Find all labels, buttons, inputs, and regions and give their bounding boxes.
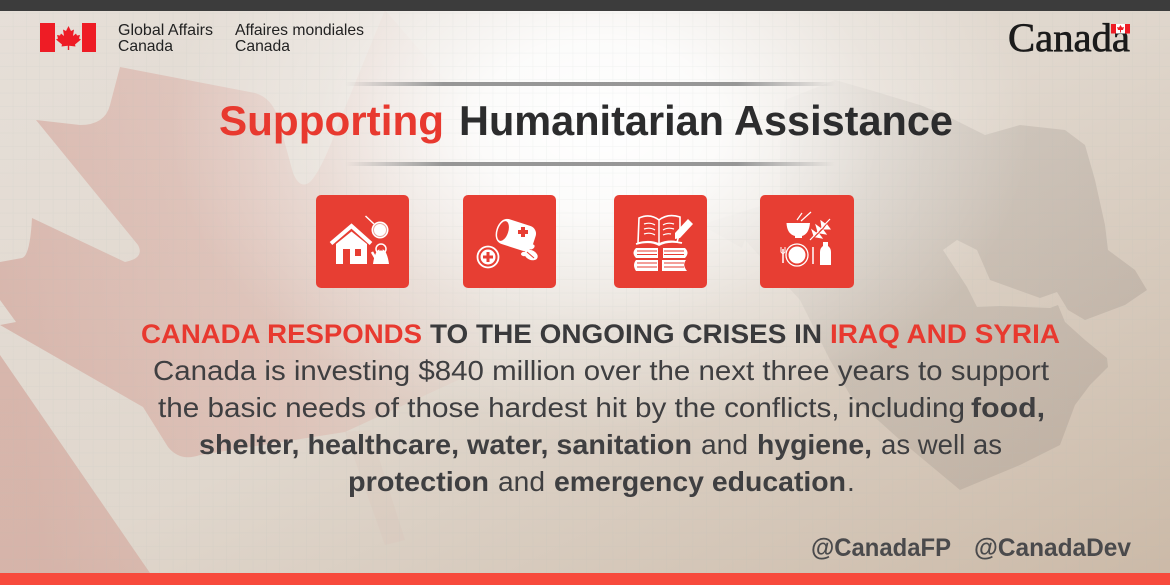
department name French bbox=[235, 22, 364, 55]
title bbox=[219, 97, 953, 144]
body paragraph: and bbox=[498, 466, 545, 497]
body paragraph: the basic needs of those hardest hit by the conflicts, including bbox=[158, 392, 965, 423]
Canada wordmark: Canada bbox=[1008, 15, 1130, 60]
section heading: TO THE ONGOING CRISES IN bbox=[430, 319, 822, 349]
icon: food and water bbox=[760, 195, 854, 288]
title rule bottom bbox=[345, 162, 835, 166]
map of the Middle East watermark bbox=[690, 80, 1147, 490]
bottom bar bbox=[0, 573, 1170, 585]
department name French: Canada bbox=[235, 38, 290, 55]
body paragraph: hygiene, bbox=[757, 429, 872, 460]
top bar bbox=[0, 0, 1170, 11]
social media handles: @CanadaDev bbox=[974, 534, 1131, 562]
maple leaf watermark bbox=[0, 10, 480, 573]
title: Humanitarian Assistance bbox=[459, 97, 953, 144]
department name English: Global Affairs bbox=[118, 22, 213, 39]
body paragraph: shelter, healthcare, water, sanitation bbox=[199, 429, 692, 460]
icon: shelter and household items bbox=[316, 195, 409, 288]
section heading bbox=[141, 319, 1060, 349]
body paragraph: Canada is investing $840 million over the next three years to support bbox=[153, 355, 1049, 386]
section heading: IRAQ AND SYRIA bbox=[830, 319, 1060, 349]
department name English: Canada bbox=[118, 38, 173, 55]
Government of Canada flag symbol bbox=[40, 23, 96, 52]
department name French: Affaires mondiales bbox=[235, 22, 364, 39]
body paragraph: emergency education bbox=[554, 466, 846, 497]
icon: medicine bbox=[463, 195, 556, 288]
title rule top bbox=[345, 82, 835, 86]
social media handles: @CanadaFP bbox=[811, 534, 951, 562]
section heading: CANADA RESPONDS bbox=[141, 319, 422, 349]
body paragraph: and bbox=[701, 429, 748, 460]
body paragraph: protection bbox=[348, 466, 489, 497]
title: Supporting bbox=[219, 97, 444, 144]
body paragraph bbox=[153, 355, 1049, 497]
body paragraph: food, bbox=[971, 392, 1045, 423]
department name English bbox=[118, 22, 213, 55]
social media handles bbox=[811, 534, 1131, 562]
body paragraph: . bbox=[847, 466, 855, 497]
icon: books and education bbox=[614, 195, 707, 288]
body paragraph: as well as bbox=[881, 429, 1002, 460]
